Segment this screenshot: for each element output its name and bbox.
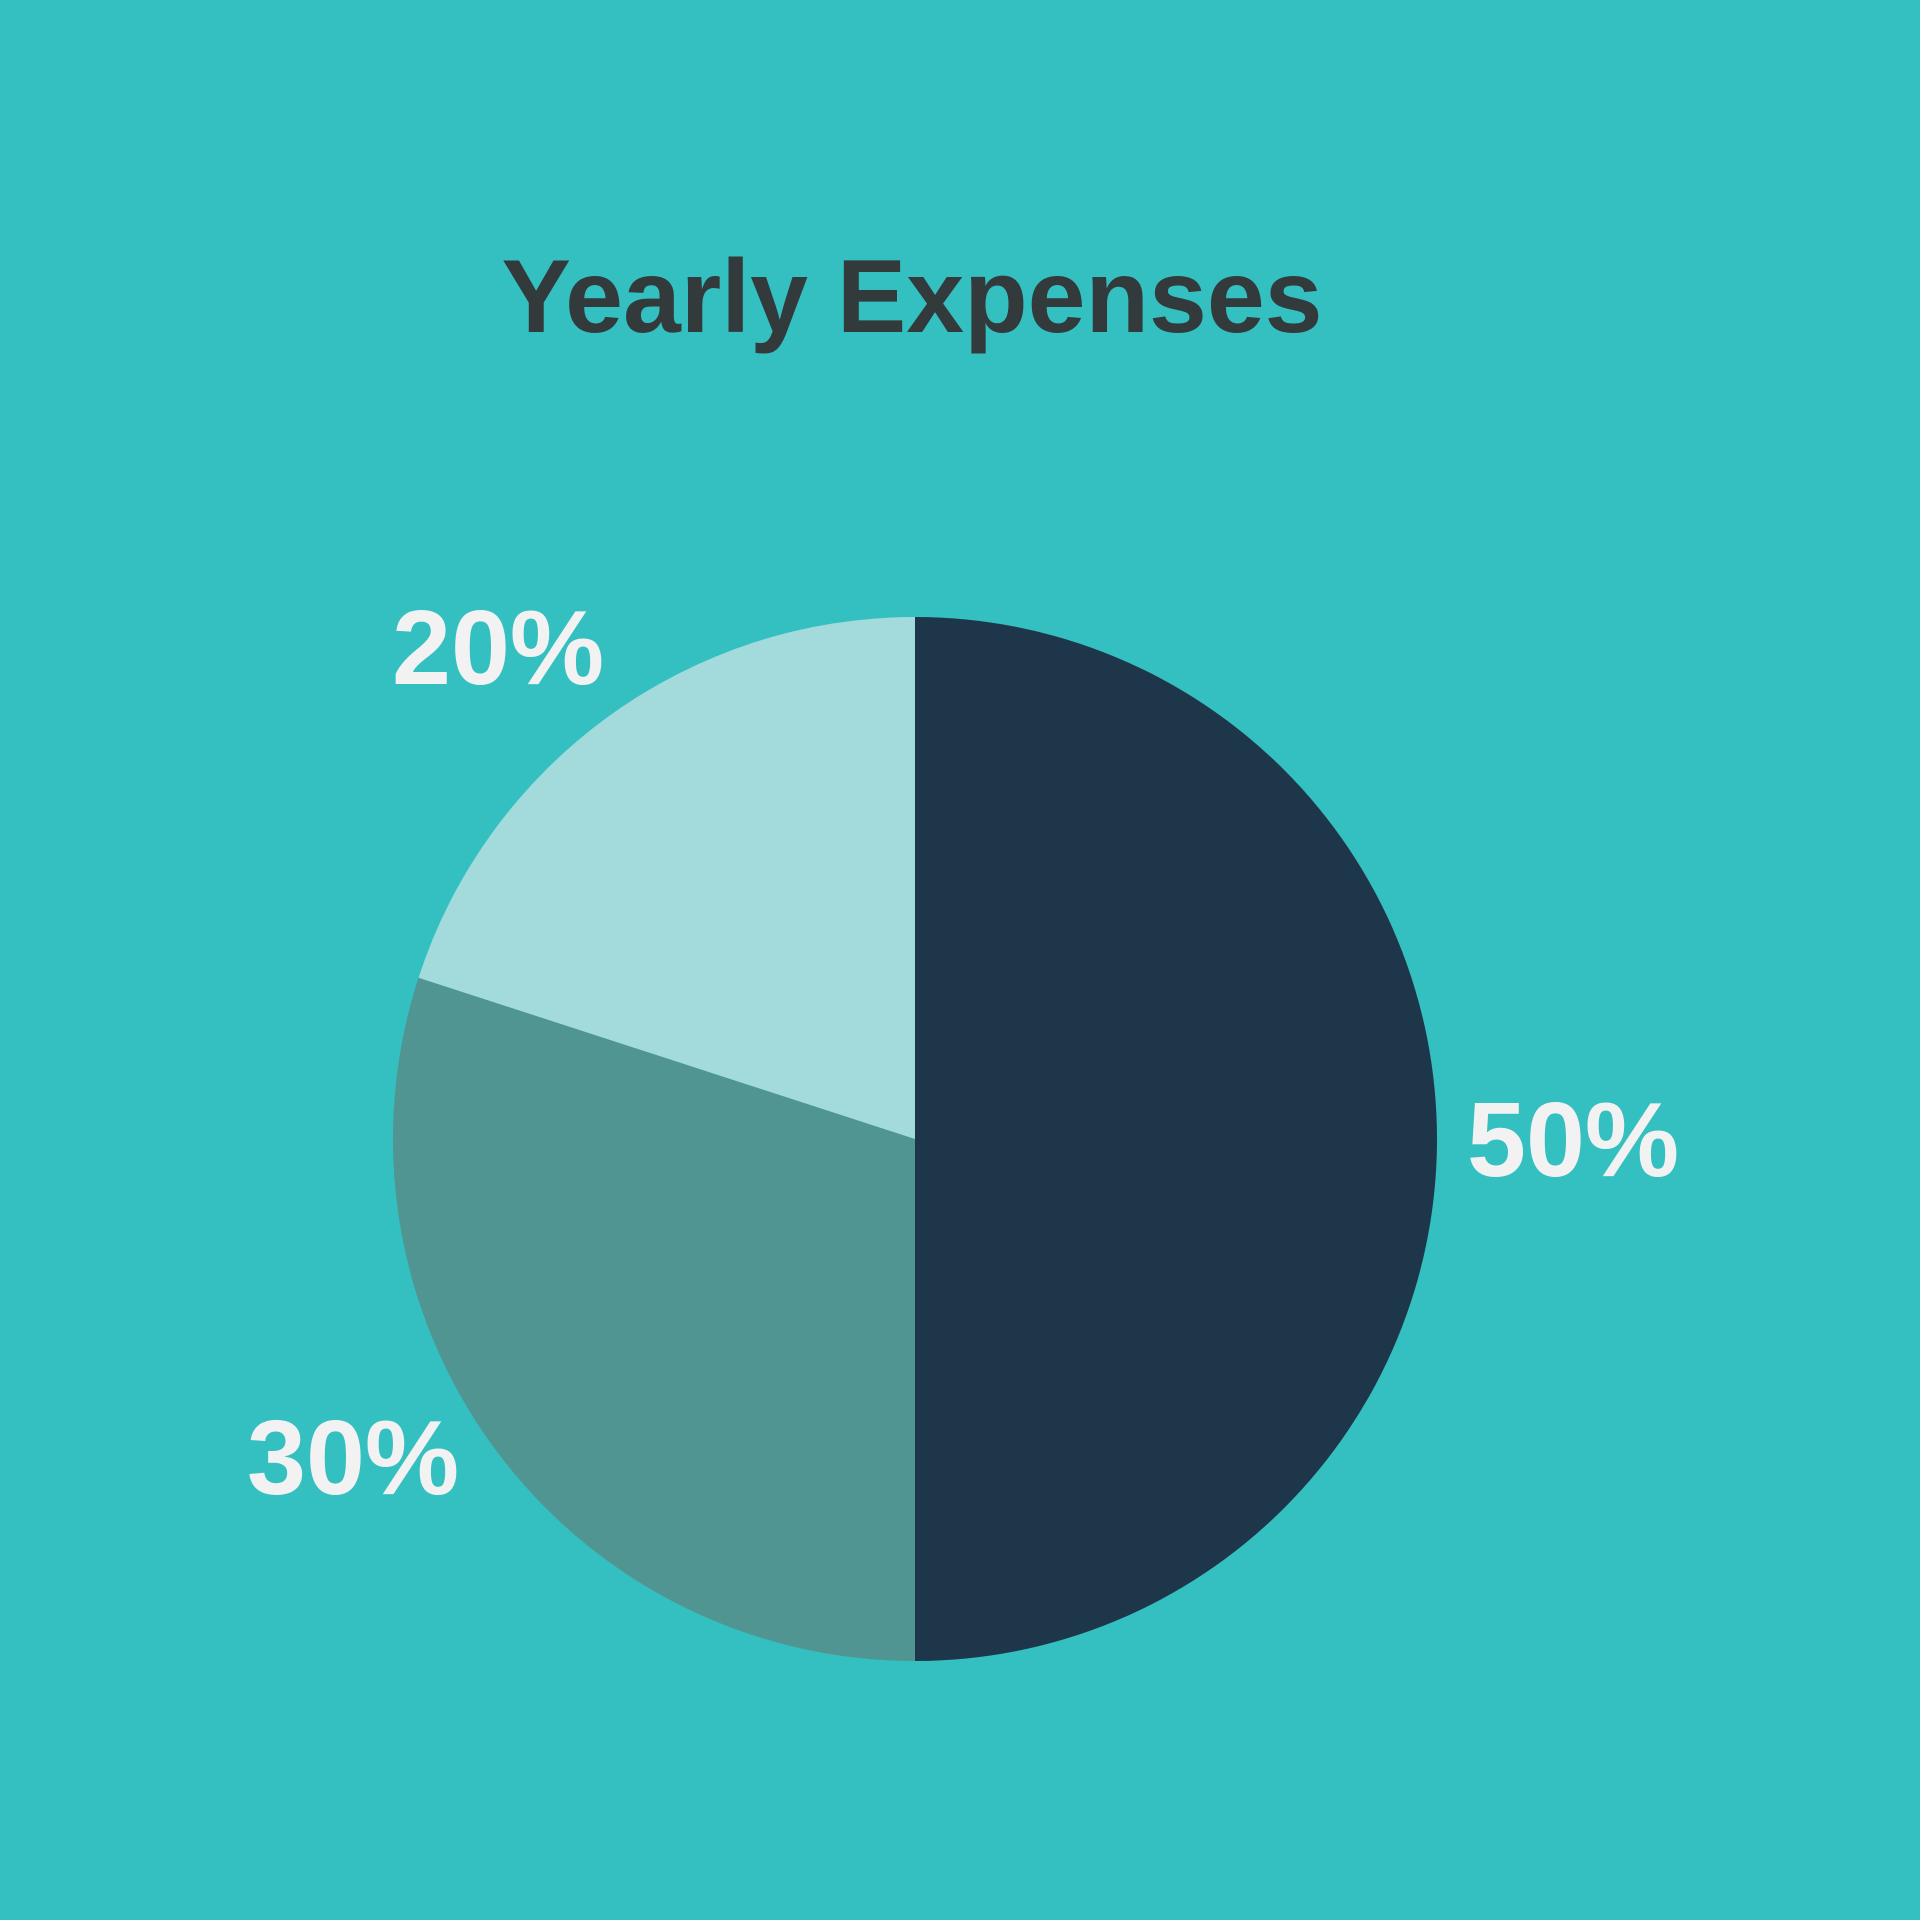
title: Yearly Expenses xyxy=(501,239,1323,355)
slice: 20% xyxy=(418,617,915,1139)
pie chart xyxy=(393,617,1437,1661)
slice: 30% xyxy=(393,978,915,1661)
slice: 50% xyxy=(915,617,1437,1661)
label: 20%: 20% xyxy=(392,589,604,707)
label: 30%: 30% xyxy=(247,1399,459,1517)
label: 50%: 50% xyxy=(1467,1081,1679,1199)
